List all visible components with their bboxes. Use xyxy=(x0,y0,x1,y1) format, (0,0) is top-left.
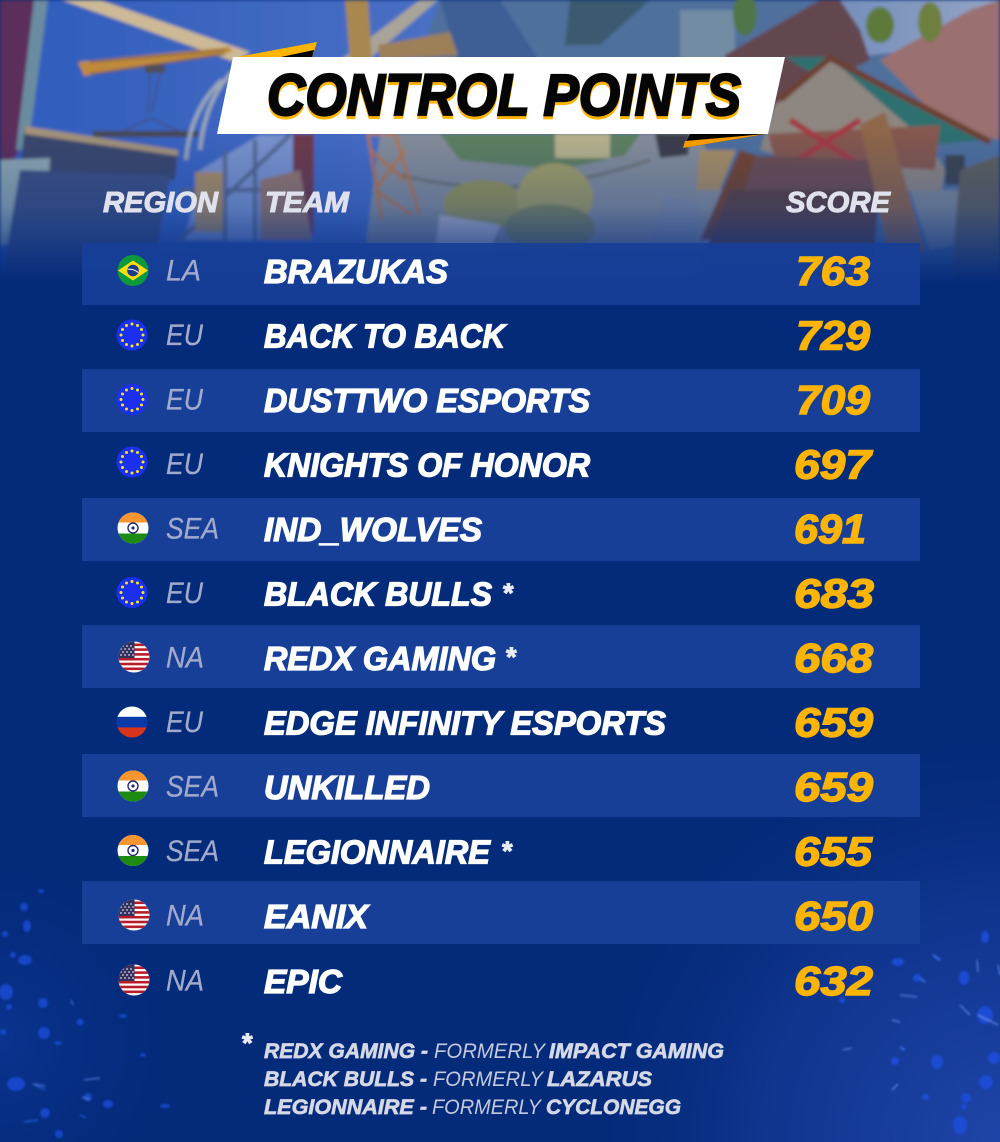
row 8: Edge Infinity Esports: EU xyxy=(166,706,203,739)
footnote: IMPACT GAMING xyxy=(549,1040,724,1063)
row 6: Black Bulls: BLACK BULLS xyxy=(264,576,492,612)
title text: CONTROL POINTS xyxy=(267,66,741,131)
footnote: FORMERLY xyxy=(434,1040,547,1063)
row 4: Knights of Honor xyxy=(116,442,873,488)
row 9: Unkilled xyxy=(117,764,873,810)
corner glow xyxy=(560,700,1000,1142)
row 10: Legionnaire: 655 xyxy=(794,828,873,874)
row 12: Epic: NA xyxy=(166,964,204,998)
row 5: IND_Wolves: SEA xyxy=(166,512,219,546)
row 11: Eanix: NA xyxy=(166,900,204,932)
row 11: Eanix: 650 xyxy=(794,893,873,939)
row 4: Knights of Honor: KNIGHTS OF HONOR xyxy=(264,446,590,484)
row bands xyxy=(82,243,920,944)
row 9: Unkilled: UNKILLED xyxy=(264,769,430,806)
row 3: Dusttwo Esports: 709 xyxy=(796,377,870,423)
row 4: Knights of Honor: 697 xyxy=(794,442,873,488)
row 10: Legionnaire: * xyxy=(501,836,513,866)
footnote: FORMERLY xyxy=(433,1068,545,1091)
row 3: Dusttwo Esports xyxy=(116,377,870,423)
title accent: bottom right xyxy=(683,134,766,148)
row 1: Brazukas: LA xyxy=(166,254,201,288)
row 6: Black Bulls xyxy=(116,570,874,616)
footnote: REDX GAMING - xyxy=(264,1040,428,1063)
title white panel xyxy=(217,57,785,134)
row 12: Epic: EPIC xyxy=(264,963,343,1000)
row 8: Edge Infinity Esports: EDGE INFINITY ESPORTS xyxy=(264,704,666,742)
row 7: REDX Gaming: * xyxy=(505,642,517,672)
particles: lower right xyxy=(839,931,1000,1134)
row 7: REDX Gaming: 668 xyxy=(794,635,873,681)
footnote: FORMERLY xyxy=(432,1096,543,1119)
row 9: Unkilled: 659 xyxy=(794,764,873,810)
row 2: Back to Back xyxy=(116,312,870,358)
particles: lower left xyxy=(0,889,170,1138)
row 7: REDX Gaming xyxy=(118,635,873,681)
title accent: top left xyxy=(232,42,317,58)
column headings: TEAM xyxy=(265,187,350,219)
row 2: Back to Back: 729 xyxy=(796,312,870,358)
footnote: CYCLONEGG xyxy=(546,1096,681,1119)
footnote: * xyxy=(241,1028,253,1058)
row 8: Edge Infinity Esports: 659 xyxy=(794,700,873,746)
footnote: LAZARUS xyxy=(547,1068,652,1091)
row 1: Brazukas: 763 xyxy=(796,248,870,294)
column headings: SCORE xyxy=(786,187,892,219)
row 11: Eanix: EANIX xyxy=(264,898,370,935)
row 7: REDX Gaming: REDX GAMING xyxy=(264,640,496,677)
background illustration: farm construction scene xyxy=(0,0,1000,290)
row 10: Legionnaire xyxy=(117,828,873,874)
row 12: Epic xyxy=(118,958,873,1004)
column headings: REGION xyxy=(103,187,219,219)
row 8: Edge Infinity Esports xyxy=(116,700,873,746)
title banner xyxy=(217,42,785,148)
row 3: Dusttwo Esports: DUSTTWO ESPORTS xyxy=(264,382,590,419)
row 2: Back to Back: EU xyxy=(166,319,203,352)
row 10: Legionnaire: LEGIONNAIRE xyxy=(264,834,491,870)
footnote: LEGIONNAIRE - xyxy=(264,1096,427,1119)
row 7: REDX Gaming: NA xyxy=(166,642,204,674)
column headings xyxy=(103,187,892,219)
footnote: BLACK BULLS - xyxy=(264,1068,427,1091)
row 9: Unkilled: SEA xyxy=(166,770,219,804)
row 10: Legionnaire: SEA xyxy=(166,835,219,868)
row 5: IND_Wolves: 691 xyxy=(794,506,866,552)
row 6: Black Bulls: 683 xyxy=(794,570,874,616)
fade from illustration to navy xyxy=(0,130,1000,300)
row 6: Black Bulls: EU xyxy=(166,577,203,610)
row 1: Brazukas: BRAZUKAS xyxy=(264,253,448,290)
row 11: Eanix xyxy=(118,893,873,939)
row 1: Brazukas xyxy=(117,248,870,294)
title text: CONTROL POINTS xyxy=(267,63,741,128)
row 4: Knights of Honor: EU xyxy=(166,448,203,481)
row 5: IND_Wolves: IND_WOLVES xyxy=(264,511,482,548)
row 12: Epic: 632 xyxy=(794,958,873,1004)
row 2: Back to Back: BACK TO BACK xyxy=(264,318,507,354)
footnote xyxy=(241,1028,724,1119)
row 3: Dusttwo Esports: EU xyxy=(166,384,203,416)
row 6: Black Bulls: * xyxy=(502,578,514,608)
row 5: IND_Wolves xyxy=(117,506,866,552)
